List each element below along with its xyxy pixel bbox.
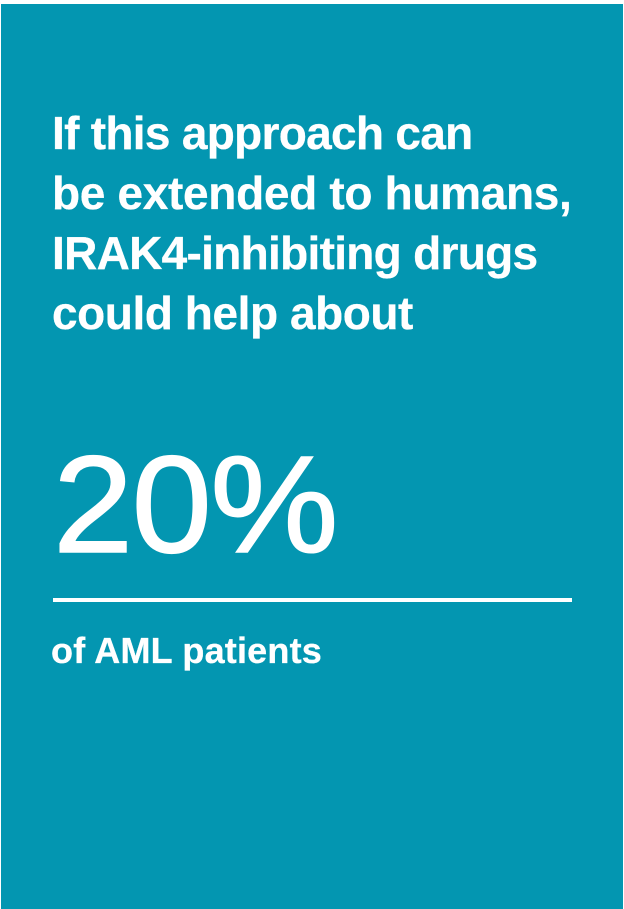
heading: could help about bbox=[52, 287, 413, 339]
caption: of AML patients bbox=[51, 630, 322, 671]
heading bbox=[52, 107, 572, 339]
divider line bbox=[53, 598, 572, 602]
heading: If this approach can bbox=[52, 107, 473, 159]
big statistic: 20% bbox=[53, 428, 337, 582]
heading: be extended to humans, bbox=[52, 167, 572, 219]
heading: IRAK4-inhibiting drugs bbox=[52, 227, 537, 279]
